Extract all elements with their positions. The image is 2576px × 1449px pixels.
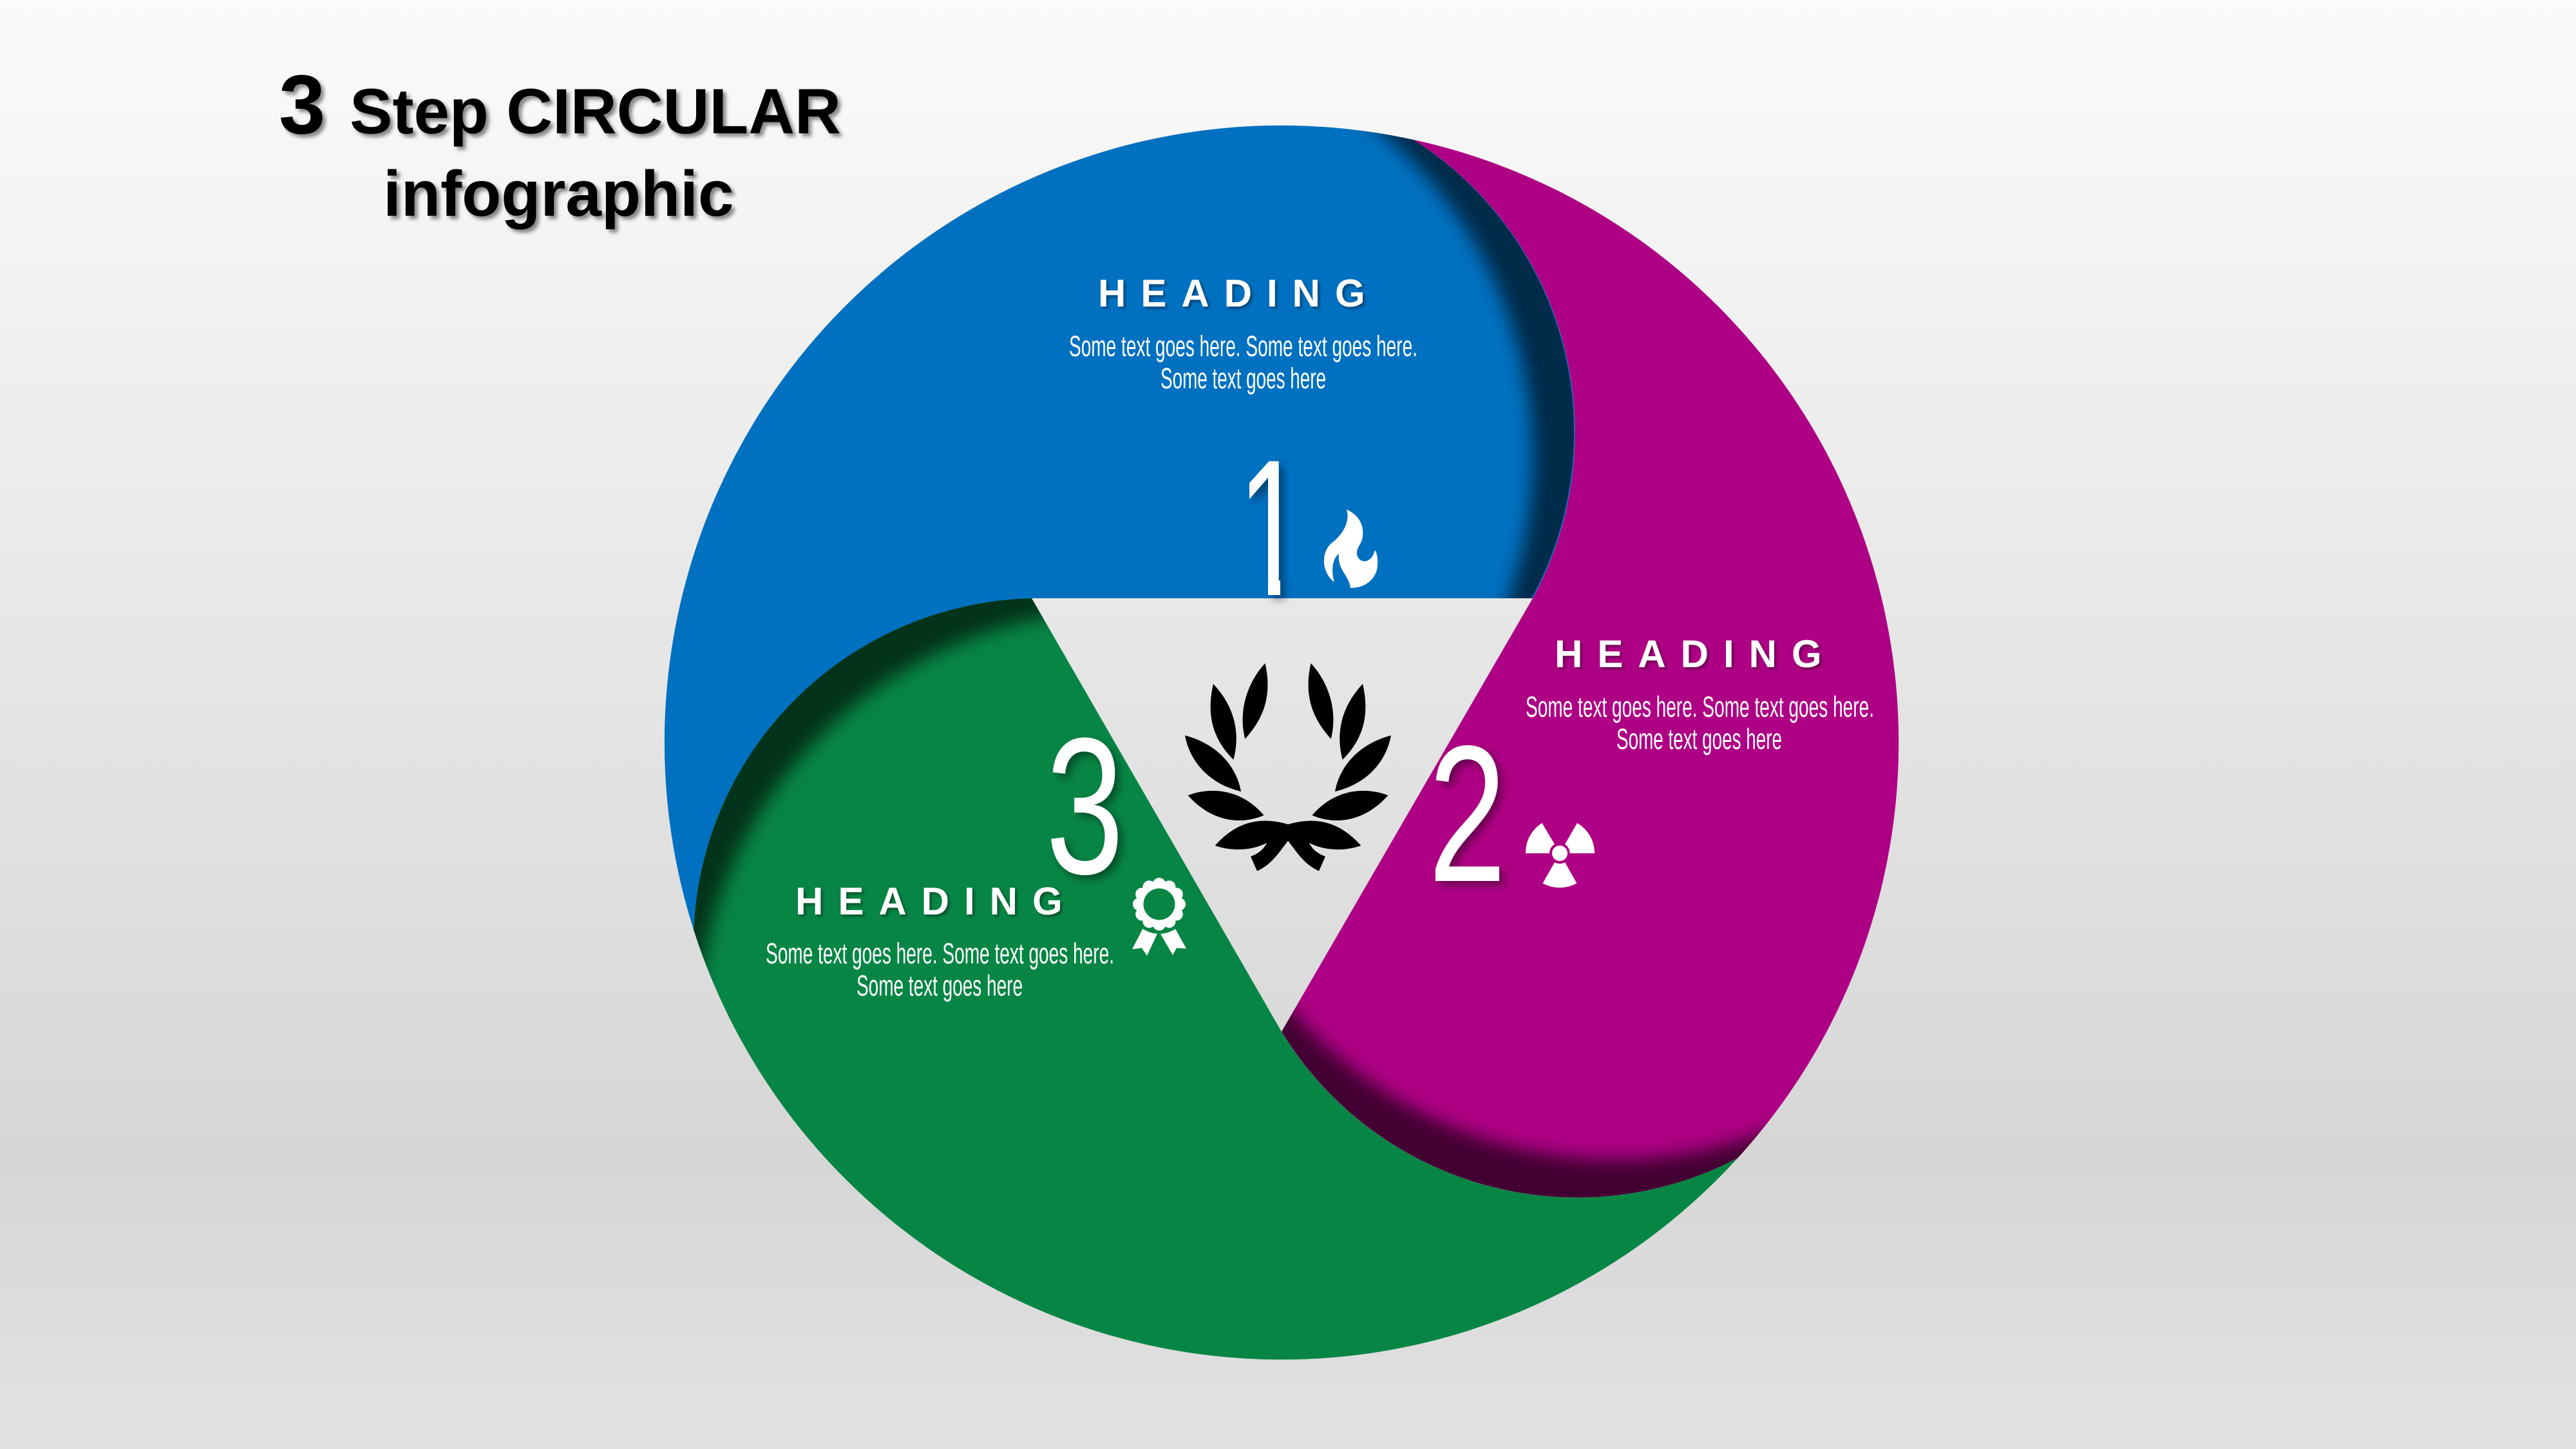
text block: step 3 [766,937,1114,1002]
heading: step 3: HEADING [795,880,1077,923]
text block: step 3: Some text goes here. Some text goes here. [766,937,1114,970]
title: Step CIRCULAR [350,76,841,147]
icon: laurel wreath [1185,663,1391,871]
panel: step 3 green segment [654,558,1738,1359]
panel: step 1 blue segment [665,125,1575,930]
text block: step 1: Some text goes here. Some text goes here. [1069,330,1417,363]
icon: award ribbon [1130,875,1189,956]
panel: step 2 magenta segment [1282,140,1899,1198]
heading: step 1: HEADING [1098,272,1380,315]
number 2: 2 [1428,705,1506,922]
heading: step 2: HEADING [1555,632,1837,676]
text block: step 2 [1526,690,1874,755]
text block: step 2: Some text goes here [1616,723,1782,755]
text block: step 3: Some text goes here [857,969,1023,1002]
text block: step 1 [1069,330,1417,395]
icon: flame [1324,509,1378,588]
number 1: 1 [1238,420,1305,637]
icon: radiation [1526,823,1595,887]
title [279,57,841,230]
title: 3 [279,57,325,151]
number 3: 3 [1046,697,1124,914]
title: infographic [383,158,734,230]
text block: step 2: Some text goes here. Some text goes here. [1526,690,1874,723]
text block: step 1: Some text goes here [1160,362,1326,395]
